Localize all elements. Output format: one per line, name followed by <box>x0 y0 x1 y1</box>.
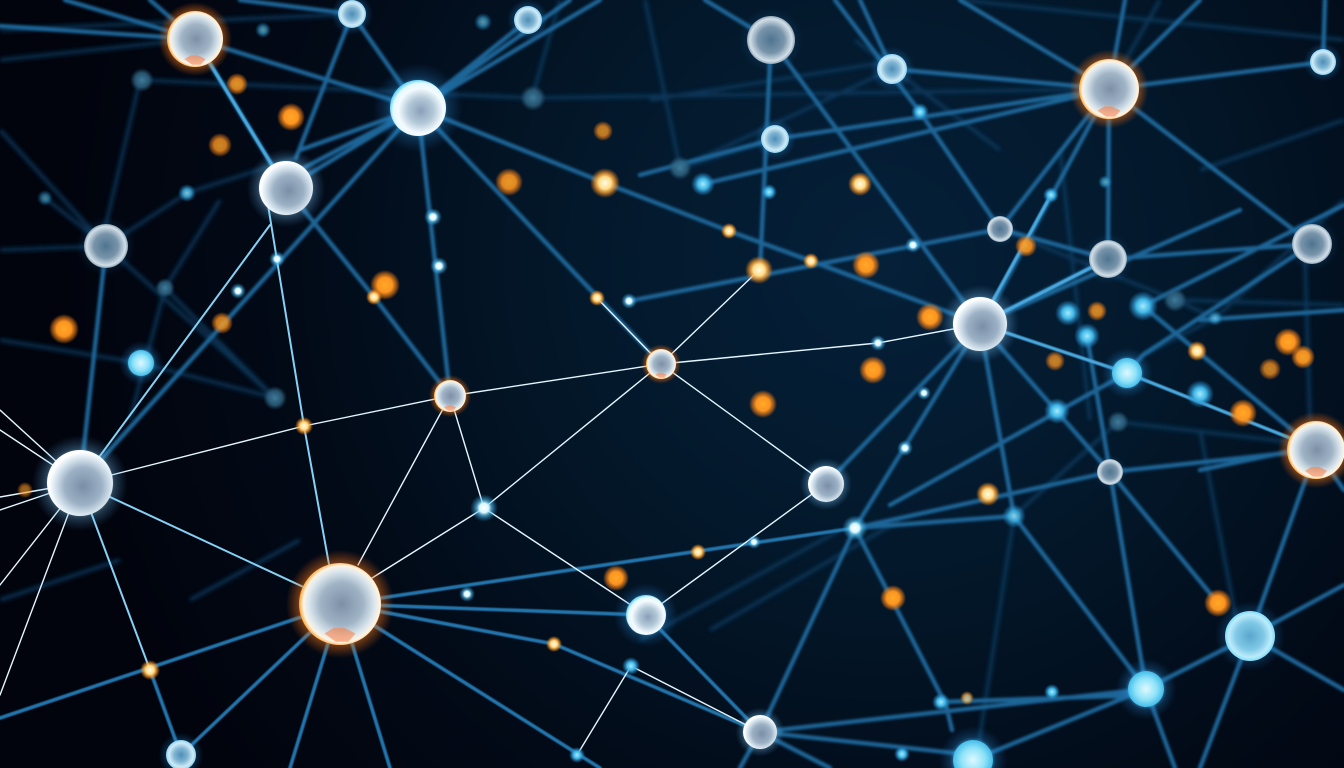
node: bottom centre <box>735 707 785 757</box>
node: upper centre blue <box>754 118 796 160</box>
cyan highlight lines <box>80 205 340 670</box>
node: right mid <box>1082 233 1134 285</box>
node: central right hub <box>941 285 1019 363</box>
small bright orange nodes <box>140 168 1207 705</box>
node: top right orange <box>1069 49 1149 129</box>
node: bottom left <box>158 732 204 768</box>
node: bottom edge <box>939 726 1007 768</box>
node: top right small <box>870 46 914 92</box>
node: top centre <box>739 8 803 72</box>
node: left blue <box>119 341 163 385</box>
node: top cyan hub <box>373 63 463 153</box>
node: centre left ring <box>429 375 471 417</box>
blue network lines, lower left foreground <box>0 528 855 768</box>
node: right upper grey <box>982 211 1018 247</box>
node: far right orange <box>1278 412 1344 488</box>
node: lower left orange hub <box>286 550 394 658</box>
node: bottom right <box>1115 658 1177 720</box>
bright thin white lines <box>0 270 980 755</box>
node: left grey <box>76 216 136 276</box>
node: top edge <box>331 0 373 35</box>
bright hub spokes <box>195 39 1290 438</box>
node: top edge 2 <box>507 0 549 41</box>
out-of-focus orange glows <box>17 73 1315 617</box>
node: left large hub <box>32 435 128 531</box>
node: centre ring <box>641 344 681 384</box>
node: right lower grey <box>1092 454 1128 490</box>
node: far right <box>1285 217 1339 271</box>
node: centre right white <box>800 458 852 510</box>
node: top left orange <box>158 2 232 76</box>
node: right cyan <box>1102 348 1152 398</box>
node: upper left white <box>247 149 325 227</box>
node: lower centre <box>614 583 678 647</box>
node: right lower blue <box>1215 601 1285 671</box>
node: top right corner <box>1304 42 1342 82</box>
